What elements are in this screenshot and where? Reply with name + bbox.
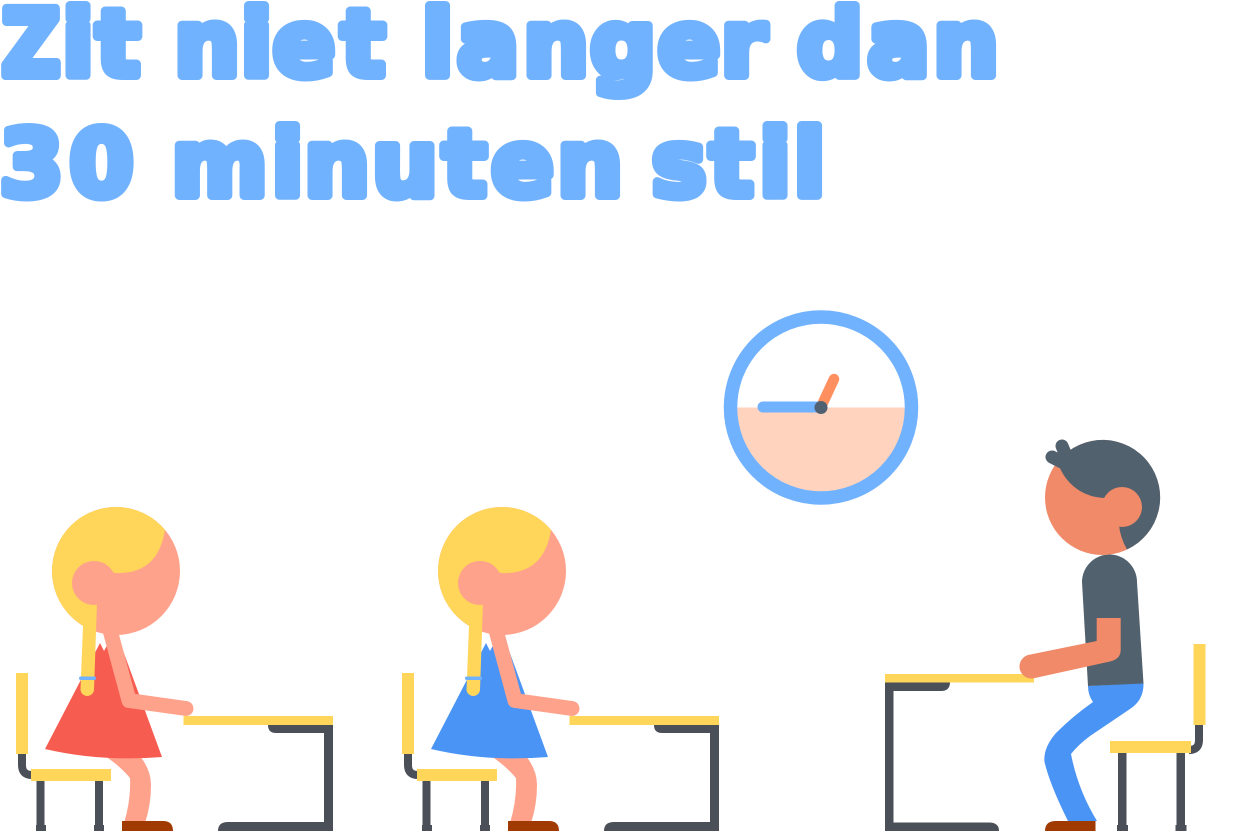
figure: girl in blue dress at desk — [402, 507, 719, 831]
desk — [885, 674, 1034, 831]
head — [438, 507, 566, 696]
arm — [1019, 618, 1121, 679]
dress — [431, 637, 548, 758]
chair — [402, 673, 497, 831]
desk — [184, 716, 333, 831]
torso — [1082, 555, 1144, 686]
head — [1045, 440, 1160, 555]
leg and shoe — [105, 756, 173, 831]
title — [0, 0, 999, 218]
title: 30 minuten stil — [0, 110, 825, 218]
desk — [570, 716, 719, 831]
chair — [1110, 644, 1206, 831]
leg and shoe — [491, 756, 559, 831]
figure: girl in red dress at desk — [16, 507, 333, 831]
trousers and shoe — [1044, 683, 1144, 831]
head — [52, 507, 180, 696]
figure: boy standing up from chair — [885, 440, 1206, 831]
chair — [16, 673, 111, 831]
arm — [496, 632, 572, 708]
dress — [45, 637, 162, 758]
icon: wall clock — [730, 317, 912, 498]
arm — [110, 632, 186, 708]
